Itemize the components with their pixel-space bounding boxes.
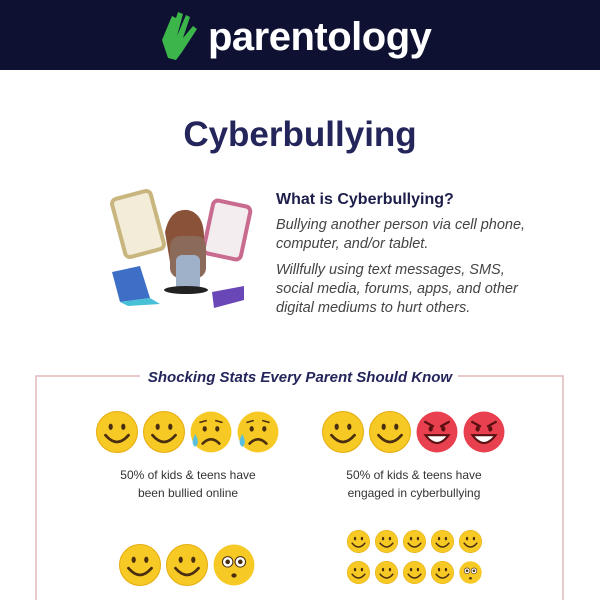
header bar — [0, 0, 600, 70]
text block: what is cyberbullying: digital mediums to hurt others. — [276, 300, 470, 316]
stat: ten faces — [347, 530, 482, 584]
stat: bullied online: been bullied online — [138, 486, 238, 500]
illustration: girl with devices — [111, 190, 251, 308]
stat: bullied online — [97, 412, 278, 500]
stat: engaged in cyberbullying: 50% of kids & teens have — [346, 468, 482, 482]
stat: engaged in cyberbullying — [323, 412, 504, 500]
panel: shocking stats — [36, 369, 563, 600]
text block: what is cyberbullying: social media, forums, apps, and other — [276, 281, 519, 297]
text block: what is cyberbullying: Willfully using text messages, SMS, — [276, 262, 505, 278]
stat: bullied online: 50% of kids & teens have — [120, 468, 256, 482]
text block: what is cyberbullying: Bullying another person via cell phone, — [276, 217, 525, 233]
text block: what is cyberbullying — [276, 191, 525, 316]
stat: engaged in cyberbullying: engaged in cyberbullying — [348, 486, 480, 500]
text block: what is cyberbullying: computer, and/or tablet. — [276, 236, 428, 252]
icon: hands logo — [162, 12, 197, 60]
text block: what is cyberbullying: What is Cyberbullying? — [276, 191, 454, 208]
stat: three faces — [120, 545, 254, 585]
panel heading: Shocking Stats Every Parent Should Know — [148, 369, 453, 386]
logo text: parentology — [208, 15, 433, 59]
title: Cyberbullying — [183, 115, 417, 154]
